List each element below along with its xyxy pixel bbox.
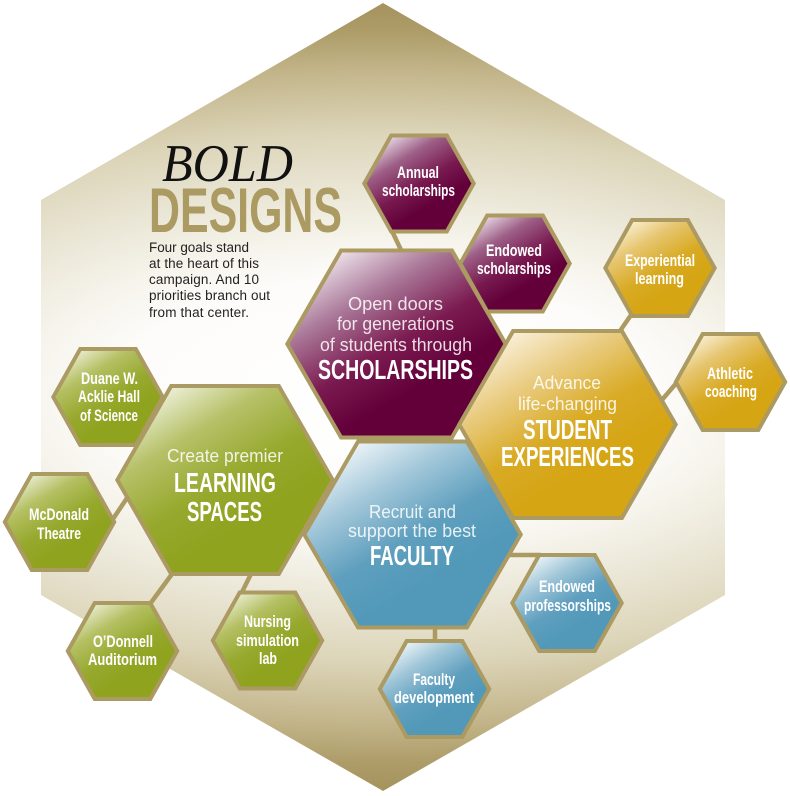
hexagon: student experiences goal: EXPERIENCES xyxy=(501,441,634,472)
hexagon: McDonald Theatre: McDonald xyxy=(29,506,89,524)
hexagon: learning spaces goal: SPACES xyxy=(187,496,262,527)
hexagon: McDonald Theatre xyxy=(5,474,114,570)
hexagon: faculty goal: support the best xyxy=(348,520,476,541)
hexagon: O'Donnell Auditorium: Auditorium xyxy=(88,651,157,669)
hexagon: Athletic coaching: Athletic xyxy=(707,365,753,383)
hexagon: Nursing simulation lab: lab xyxy=(259,650,277,668)
hexagon: Duane W. Acklie Hall of Science: of Science xyxy=(80,407,138,425)
hexagon: Endowed professorships: professorships xyxy=(524,597,611,615)
hexagon: Duane W. Acklie Hall of Science: Duane W. xyxy=(81,370,138,388)
hexagon: faculty goal xyxy=(304,442,521,628)
hexagon: learning spaces goal: LEARNING xyxy=(174,467,276,498)
hexagon: Experiential learning xyxy=(605,220,715,316)
hexagon: Annual scholarships: Annual xyxy=(397,164,439,182)
hexagon: O'Donnell Auditorium xyxy=(68,603,177,699)
hexagon: O'Donnell Auditorium: O’Donnell xyxy=(93,633,153,651)
intro text xyxy=(149,240,270,320)
title: DESIGNS xyxy=(149,176,342,246)
hexagon: faculty goal: FACULTY xyxy=(370,540,454,571)
hexagon: Nursing simulation lab xyxy=(213,592,322,688)
hexagon: Endowed professorships xyxy=(512,555,622,651)
hexagon: Experiential learning: learning xyxy=(635,270,684,288)
intro text: priorities branch out xyxy=(149,288,270,303)
hexagon: faculty goal: Recruit and xyxy=(369,501,456,522)
hexagon: Nursing simulation lab: Nursing xyxy=(244,613,291,631)
hexagon: learning spaces goal: Create premier xyxy=(167,445,283,466)
intro text: at the heart of this xyxy=(149,256,259,271)
hexagon: student experiences goal: life-changing xyxy=(518,393,617,414)
hexagon: Faculty development: development xyxy=(394,689,474,707)
hexagon: Endowed scholarships xyxy=(460,216,570,312)
hexagon: Athletic coaching xyxy=(676,334,785,430)
hexagon: Faculty development xyxy=(380,641,489,737)
title xyxy=(149,135,342,246)
hexagon: learning spaces goal xyxy=(117,386,333,574)
panel: scholarships priorities xyxy=(364,136,570,312)
panel: student experiences priorities xyxy=(605,220,785,430)
intro text: campaign. And 10 xyxy=(149,272,259,287)
hexagon: Endowed scholarships: scholarships xyxy=(477,260,551,278)
connector lines xyxy=(113,231,679,642)
intro text: Four goals stand xyxy=(149,240,249,255)
title: BOLD xyxy=(162,135,293,193)
hexagon: Endowed professorships: Endowed xyxy=(539,578,595,596)
hexagon: Annual scholarships: scholarships xyxy=(382,182,455,200)
hexagon: Annual scholarships xyxy=(364,136,474,232)
hexagon: student experiences goal: Advance xyxy=(533,372,601,393)
hexagon: McDonald Theatre: Theatre xyxy=(37,525,81,543)
hexagon: scholarships goal: for generations xyxy=(337,313,454,334)
hexagon: Faculty development: Faculty xyxy=(413,671,456,689)
hexagon: scholarships goal: Open doors xyxy=(348,293,443,314)
panel: learning spaces priorities xyxy=(5,349,322,699)
hexagon: Duane W. Acklie Hall of Science: Acklie Hall xyxy=(78,388,140,406)
intro text: from that center. xyxy=(149,305,249,320)
hexagon: Duane W. Acklie Hall of Science xyxy=(53,349,163,445)
hexagon: scholarships goal xyxy=(287,250,506,438)
hexagon: scholarships goal: SCHOLARSHIPS xyxy=(318,354,473,385)
hexagon: Athletic coaching: coaching xyxy=(705,383,757,401)
hexagon: Nursing simulation lab: simulation xyxy=(236,632,299,650)
hexagon: scholarships goal: of students through xyxy=(320,334,472,355)
hexagon: Endowed scholarships: Endowed xyxy=(486,242,542,260)
hexagon: Experiential learning: Experiential xyxy=(625,252,695,270)
hexagon: student experiences goal: STUDENT xyxy=(523,414,612,445)
panel: faculty priorities xyxy=(380,555,622,737)
hexagon: student experiences goal xyxy=(459,331,676,518)
